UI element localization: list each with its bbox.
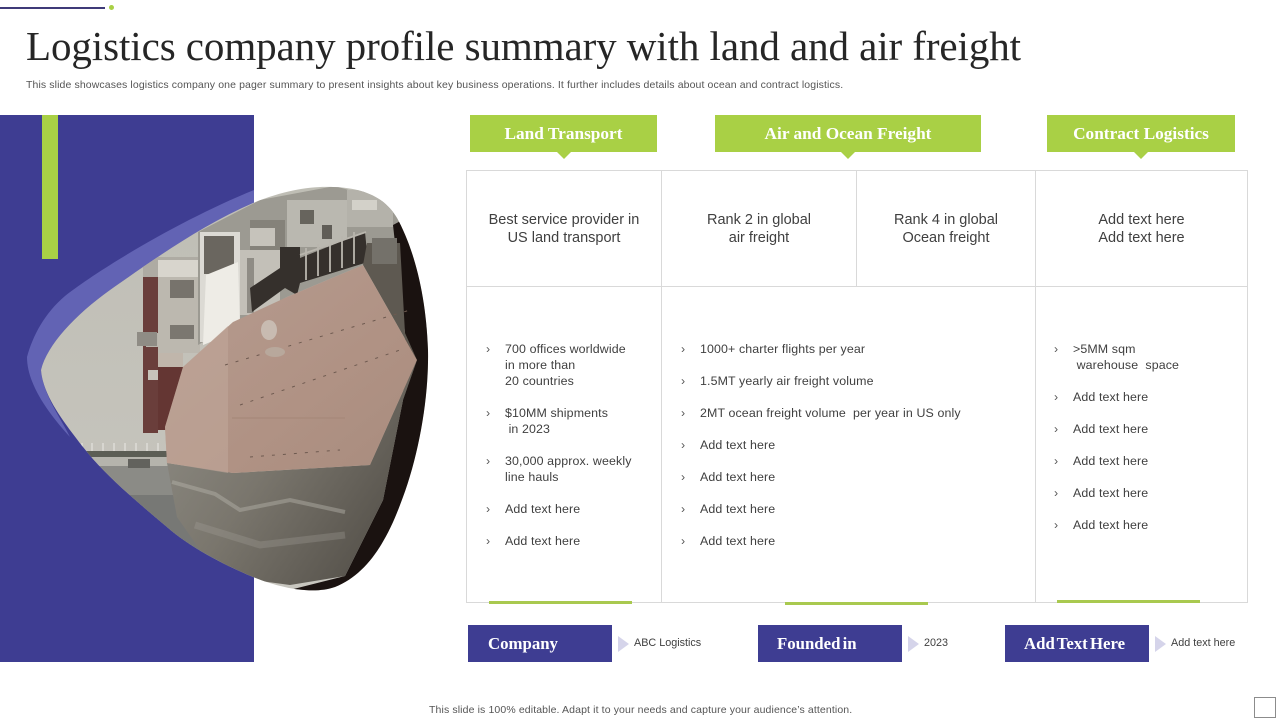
railing	[250, 232, 368, 312]
list: land transport: Add text here	[505, 534, 580, 548]
list: air and ocean freight: Add text here	[700, 502, 775, 516]
list: air and ocean freight: 1.5MT yearly air freight volume	[700, 374, 874, 388]
green accent: land column	[489, 601, 632, 604]
corner box	[1254, 697, 1276, 718]
label box: founded: Founded in	[777, 634, 857, 653]
panel: blue background block	[0, 115, 254, 662]
footer note: This slide is 100% editable. Adapt it to your needs and capture your audience’s attention.	[429, 704, 852, 716]
list: land transport: 30,000 approx. weekly line hauls	[505, 454, 632, 484]
light blue blob edge	[27, 190, 254, 437]
green accent: contract column	[1057, 600, 1200, 603]
value: company: ABC Logistics	[634, 637, 701, 649]
list: land transport: Add text here	[505, 502, 580, 516]
label box: founded	[758, 625, 902, 662]
green accent: freight column	[785, 602, 928, 605]
list: contract logistics: Add text here	[1073, 390, 1148, 404]
list: land transport: 700 offices worldwide in more than 20 countries	[505, 342, 626, 388]
ship photo	[41, 186, 428, 590]
label box: company	[468, 625, 612, 662]
cell: land transport summary: Best service provider in	[489, 212, 639, 228]
panel: land transport header	[470, 115, 657, 152]
list: air and ocean freight: 2MT ocean freight volume per year in US only	[700, 406, 961, 420]
label box: company: Company	[488, 634, 558, 653]
list: air and ocean freight: Add text here	[700, 470, 775, 484]
list: contract logistics: Add text here	[1073, 454, 1148, 468]
air and ocean pointer	[841, 152, 855, 159]
cell: ocean freight rank: Ocean freight	[902, 230, 990, 246]
value: add text: Add text here	[1171, 637, 1235, 649]
contract logistics pointer	[1134, 152, 1148, 159]
arrow: company	[618, 636, 629, 652]
panel: contract logistics header	[1047, 115, 1235, 152]
title: Logistics company profile summary with land and air freight	[26, 23, 1021, 69]
panel: air and ocean freight header: Air and Ocean Freight	[765, 124, 931, 143]
cell: land transport summary	[489, 212, 639, 246]
pink hull	[165, 265, 417, 473]
cell: contract summary	[1098, 212, 1185, 246]
superstructure	[198, 186, 405, 345]
list: air and ocean freight	[682, 342, 961, 548]
label box: add text	[1005, 625, 1149, 662]
list: contract logistics	[1054, 342, 1179, 532]
top accent line	[0, 5, 114, 10]
right dark side	[294, 222, 428, 590]
panel: land transport header: Land Transport	[505, 124, 622, 143]
green vertical accent bar	[42, 115, 58, 259]
list: contract logistics: Add text here	[1073, 486, 1148, 500]
table grid	[466, 170, 1248, 603]
arrow: founded	[908, 636, 919, 652]
land transport pointer	[557, 152, 571, 159]
list: contract logistics: Add text here	[1073, 518, 1148, 532]
lower hull	[167, 360, 417, 585]
photo: ship hull in rounded blob	[27, 186, 428, 590]
list: air and ocean freight: 1000+ charter flights per year	[700, 342, 865, 356]
cell: ocean freight rank	[894, 212, 998, 246]
arrow: add text	[1155, 636, 1166, 652]
value: founded: 2023	[924, 637, 948, 649]
list: contract logistics: >5MM sqm warehouse space	[1073, 342, 1179, 372]
subtitle: This slide showcases logistics company one pager summary to present insights about key business operations. It further includes details about ocean and contract logistics.	[26, 79, 843, 91]
cell: ocean freight rank: Rank 4 in global	[894, 212, 998, 228]
cell: air freight rank: Rank 2 in global	[707, 212, 811, 228]
panel: air and ocean freight header	[715, 115, 981, 152]
list: air and ocean freight: Add text here	[700, 438, 775, 452]
list: contract logistics: Add text here	[1073, 422, 1148, 436]
cell: contract summary: Add text here	[1098, 212, 1185, 228]
list: land transport: $10MM shipments in 2023	[505, 406, 608, 436]
label box: add text: Add Text Here	[1024, 634, 1125, 653]
cell: air freight rank	[707, 212, 811, 246]
cell: land transport summary: US land transport	[508, 230, 620, 246]
list: air and ocean freight: Add text here	[700, 534, 775, 548]
cell: contract summary: Add text here	[1098, 230, 1185, 246]
panel: contract logistics header: Contract Logistics	[1073, 124, 1209, 143]
cell: air freight rank: air freight	[729, 230, 789, 246]
list: land transport	[486, 342, 632, 548]
tower	[143, 273, 158, 433]
